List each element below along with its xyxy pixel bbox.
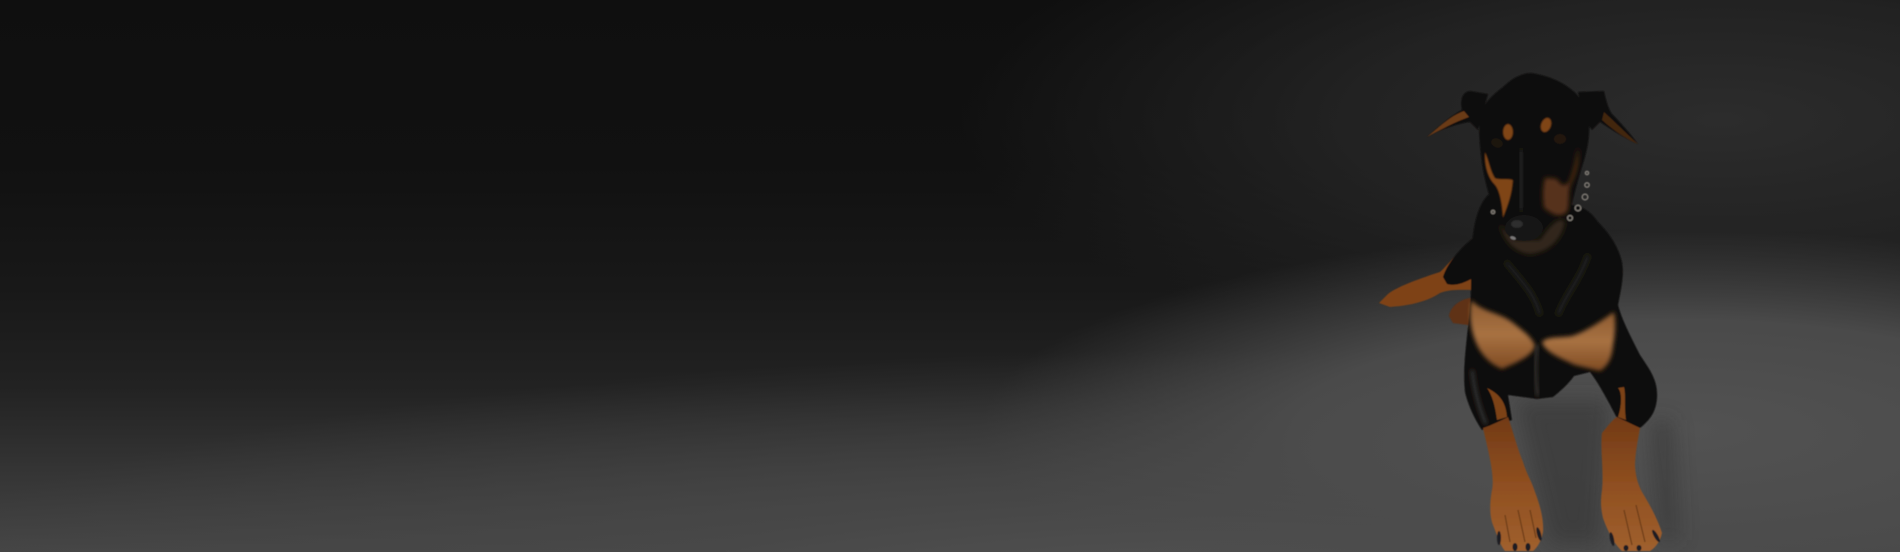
claws	[1497, 527, 1543, 551]
eyebrow left	[1503, 124, 1513, 140]
body	[1464, 195, 1657, 430]
nose	[1505, 215, 1543, 241]
tan chest patch left	[1470, 300, 1535, 369]
eyebrow right	[1539, 116, 1553, 134]
left ear	[1427, 91, 1488, 137]
tan chest patch right	[1542, 312, 1615, 371]
dog shadow on floor	[1515, 400, 1678, 545]
left cheek tan	[1485, 152, 1513, 218]
eye left	[1490, 137, 1504, 149]
left foreleg and paw	[1472, 370, 1543, 551]
chest sheen	[1506, 255, 1588, 315]
right ear	[1578, 91, 1638, 144]
chest centre fold	[1535, 345, 1538, 396]
doberman dog	[1379, 73, 1662, 551]
claws	[1609, 529, 1661, 551]
eye right	[1554, 134, 1566, 144]
muzzle underside	[1500, 220, 1565, 254]
head	[1479, 73, 1589, 255]
right cheek tan	[1543, 148, 1578, 215]
head sheen	[1520, 150, 1522, 210]
rear leg and paw	[1379, 238, 1474, 325]
right foreleg and paw	[1601, 387, 1662, 551]
spiked collar	[1491, 171, 1589, 220]
